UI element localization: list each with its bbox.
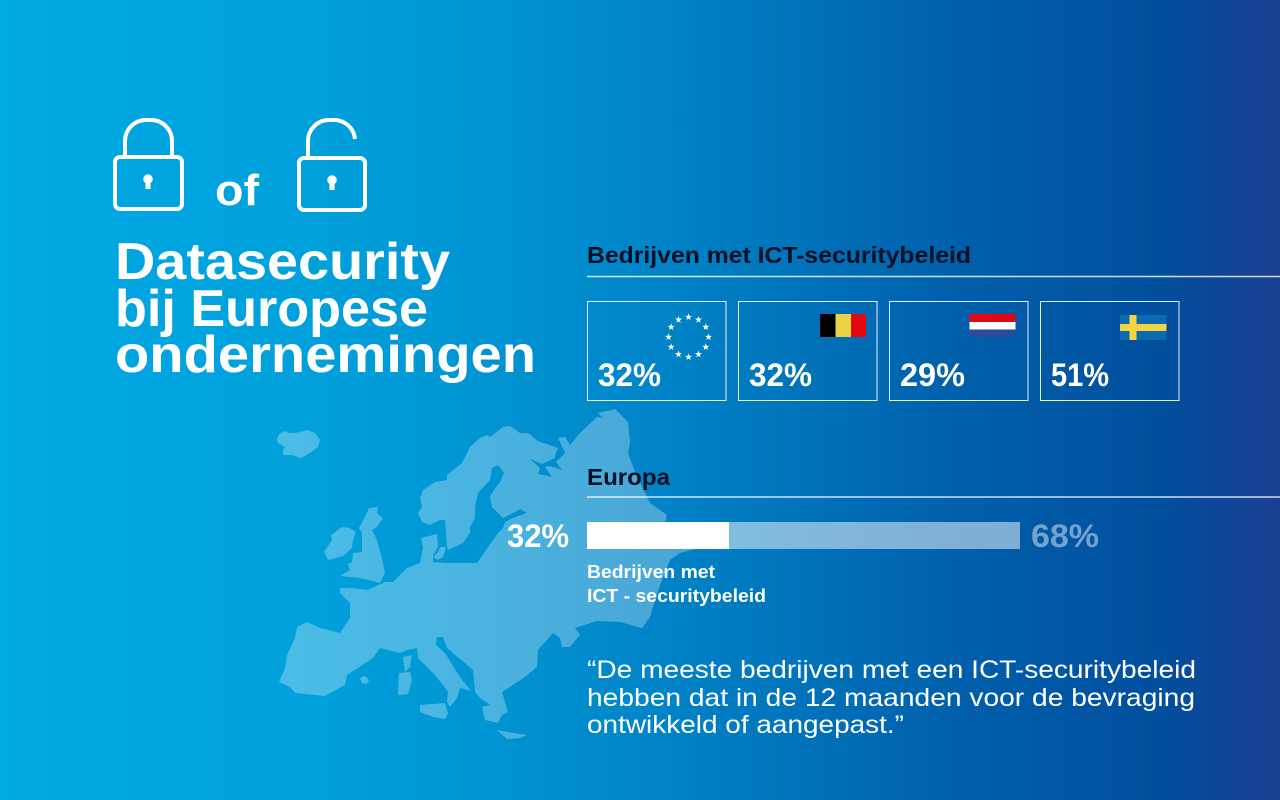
icon: Dutch flag [970,314,1016,337]
title [115,233,536,384]
title: Datasecurity [115,233,450,291]
panel: Sweden 51%: 51% [1051,357,1109,393]
quote: ontwikkeld of aangepast.” [587,711,904,739]
bar value 32% [587,522,729,549]
map: Corsica [403,655,412,672]
panel: EU 32%: 32% [598,357,661,393]
label: 32%: 32% [507,518,569,554]
panel: Belgium 32%: 32% [749,357,812,393]
icon: closed lock [115,120,182,209]
quote [587,656,1196,739]
bar chart: Europa [507,518,1099,554]
panel: Sweden 51% [1040,302,1179,400]
bar caption: ICT - securitybeleid [587,586,766,606]
panel: Netherlands 29%: 29% [900,357,965,393]
of: of [215,166,259,215]
map: Sicily [420,703,448,719]
section heading: Bedrijven met ICT-securitybeleid: Bedrijven met ICT-securitybeleid [587,242,971,268]
label: 68%: 68% [1031,518,1099,554]
map: mainland [279,409,695,723]
title: bij Europese [115,280,428,338]
map: Sardinia [398,672,412,695]
bar caption: Bedrijven met [587,562,715,582]
quote: hebben dat in de 12 maanden voor de bevraging [587,684,1195,712]
section heading: Europa: Europa [587,464,670,490]
quote: “De meeste bedrijven met een ICT-securitybeleid [587,656,1196,684]
map: Balearic Islands [360,676,369,684]
map of Europe [277,409,695,739]
icon: open lock [299,120,365,210]
panel: Belgium 32% [738,302,877,400]
panel: EU 32% [588,302,726,400]
map: Great Britain [340,507,385,583]
icon: EU stars [665,313,712,360]
map: Crete [497,730,527,739]
icon: Swedish flag [1120,315,1166,340]
title: ondernemingen [115,326,536,384]
map: Ireland [324,527,356,560]
bar remainder 68% [587,522,1020,549]
locks [115,120,365,215]
panel: Netherlands 29% [890,302,1028,400]
map: Danish islands [433,547,446,560]
map: Iceland [277,430,320,458]
bar caption [587,562,766,606]
icon: Belgian flag [820,314,866,337]
